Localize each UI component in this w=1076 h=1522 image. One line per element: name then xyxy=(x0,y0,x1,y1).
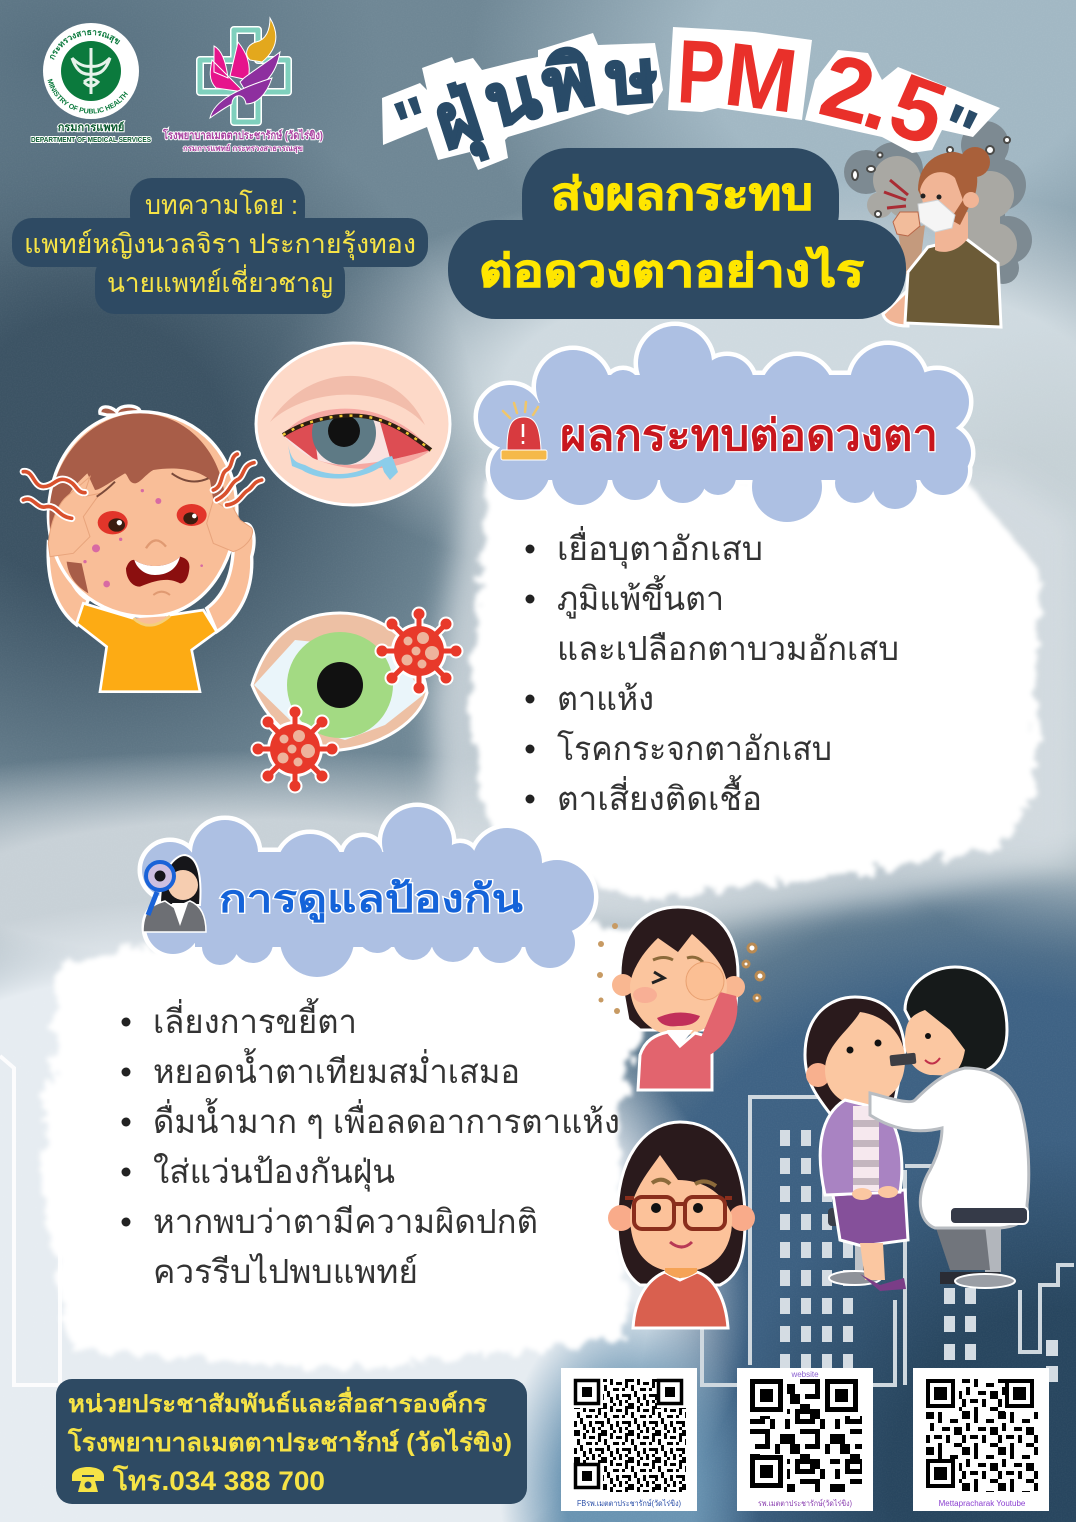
author credit: บทความโดย : xyxy=(145,190,298,220)
illustration: woman rubbing her eye xyxy=(597,907,764,1090)
title: toxic dust PM 2.5: พิ xyxy=(536,38,601,127)
logo: Ministry of Public Health: MINISTRY OF PUBLIC HEALTH xyxy=(48,78,128,114)
contact panel xyxy=(56,1379,527,1504)
icon: woman with magnifying glass xyxy=(143,855,206,932)
contact panel: โทร.034 388 700 xyxy=(112,1464,325,1496)
logo: Mettapracharak Hospital: กรมการแพทย์ กระทรวงสาธารณสุข xyxy=(183,143,303,154)
author credit: นายแพทย์เชี่ยวชาญ xyxy=(107,264,333,298)
QR code: website xyxy=(737,1368,873,1511)
illustration: inflamed eye close-up xyxy=(256,343,450,505)
QR code: Facebook: FBรพ.เมตตาประชารักษ์(วัดไร่ขิง) xyxy=(577,1498,681,1508)
list: care and prevention: เลี่ยงการขยี้ตา xyxy=(153,998,357,1040)
illustration: boy rubbing irritated eyes xyxy=(23,406,262,692)
logo: Ministry of Public Health: กรมการแพทย์ xyxy=(58,121,124,134)
author credit xyxy=(12,178,428,314)
list: effects on the eyes: ตาเสี่ยงติดเชื้อ xyxy=(557,775,762,817)
author credit: แพทย์หญิงนวลจิรา ประกายรุ้งทอง xyxy=(24,228,416,261)
panel heading: effects on the eyes xyxy=(478,326,971,522)
list: care and prevention: หยอดน้ำตาเทียมสม่ำเสมอ xyxy=(153,1048,520,1090)
subtitle: ส่งผลกระทบ xyxy=(551,170,813,219)
QR code: website: รพ.เมตตาประชารักษ์(วัดไร่ขิง) xyxy=(758,1498,852,1508)
list: care and prevention: ดื่มน้ำมาก ๆ เพื่อลดอาการตาแห้ง xyxy=(153,1098,620,1140)
list: effects on the eyes: ภูมิแพ้ขึ้นตา xyxy=(557,575,724,619)
title: toxic dust PM 2.5: ษ xyxy=(603,35,661,120)
icon: virus lower xyxy=(250,704,340,794)
title: toxic dust PM 2.5: " xyxy=(926,88,988,173)
list: care and prevention: ควรรีบไปพบแพทย์ xyxy=(153,1253,418,1290)
subtitle xyxy=(448,148,906,319)
contact panel: หน่วยประชาสัมพันธ์และสื่อสารองค์กร xyxy=(68,1386,487,1418)
list: care and prevention: ใส่แว่นป้องกันฝุ่น xyxy=(153,1153,395,1192)
contact panel: โรงพยาบาลเมตตาประชารักษ์ (วัดไร่ขิง) xyxy=(67,1427,512,1457)
QR code: YouTube xyxy=(913,1368,1049,1511)
QR code: Facebook xyxy=(561,1368,697,1511)
list: effects on the eyes xyxy=(526,526,899,817)
title: toxic dust PM 2.5: . xyxy=(853,48,908,151)
list: care and prevention xyxy=(122,998,620,1290)
QR code: website: website xyxy=(790,1370,819,1379)
icon: telephone xyxy=(72,1467,104,1492)
title: toxic dust PM 2.5: ฝุ่ xyxy=(424,71,493,171)
city skyline illustration xyxy=(702,1097,1074,1385)
title: toxic dust PM 2.5: P xyxy=(675,22,727,124)
logo: Mettapracharak Hospital xyxy=(162,18,323,154)
panel heading: effects on the eyes: ผลกระทบต่อดวงตา xyxy=(560,412,938,460)
logo: Ministry of Public Health: DEPARTMENT OF MEDICAL SERVICES xyxy=(31,135,151,144)
list: effects on the eyes: ตาแห้ง xyxy=(557,680,654,717)
list: effects on the eyes: และเปลือกตาบวมอักเสบ xyxy=(557,630,899,667)
illustration: infected eye with viruses xyxy=(252,606,464,751)
icon: virus upper xyxy=(374,606,464,696)
QR code: YouTube: Mettapracharak Youtube xyxy=(939,1499,1026,1508)
title: toxic dust PM 2.5: 2 xyxy=(811,35,884,145)
title: toxic dust PM 2.5: M xyxy=(720,24,803,132)
illustration: doctor examining patient's eye xyxy=(805,967,1029,1291)
title: toxic dust PM 2.5: 5 xyxy=(877,55,958,166)
panel heading: care and prevention xyxy=(142,807,594,977)
illustration: woman coughing in dust xyxy=(844,121,1032,327)
title: toxic dust PM 2.5: " xyxy=(384,80,442,165)
illustration: woman wearing glasses xyxy=(608,1122,755,1328)
logo: Ministry of Public Health xyxy=(30,23,152,144)
title: toxic dust PM 2.5 xyxy=(382,22,1000,173)
logo: Ministry of Public Health: กระทรวงสาธารณสุข xyxy=(50,30,120,60)
icon: siren xyxy=(501,402,547,460)
panel heading: care and prevention: การดูแลป้องกัน xyxy=(219,878,523,923)
list: effects on the eyes: เยื่อบุตาอักเสบ xyxy=(557,526,763,569)
title: toxic dust PM 2.5: น xyxy=(476,51,548,144)
logo: Mettapracharak Hospital: โรงพยาบาลเมตตาประชารักษ์ (วัดไร่ขิง) xyxy=(162,128,323,142)
list: effects on the eyes: โรคกระจกตาอักเสบ xyxy=(557,730,832,767)
subtitle: ต่อดวงตาอย่างไร xyxy=(479,245,864,296)
list: care and prevention: หากพบว่าตามีความผิดปกติ xyxy=(153,1203,538,1240)
